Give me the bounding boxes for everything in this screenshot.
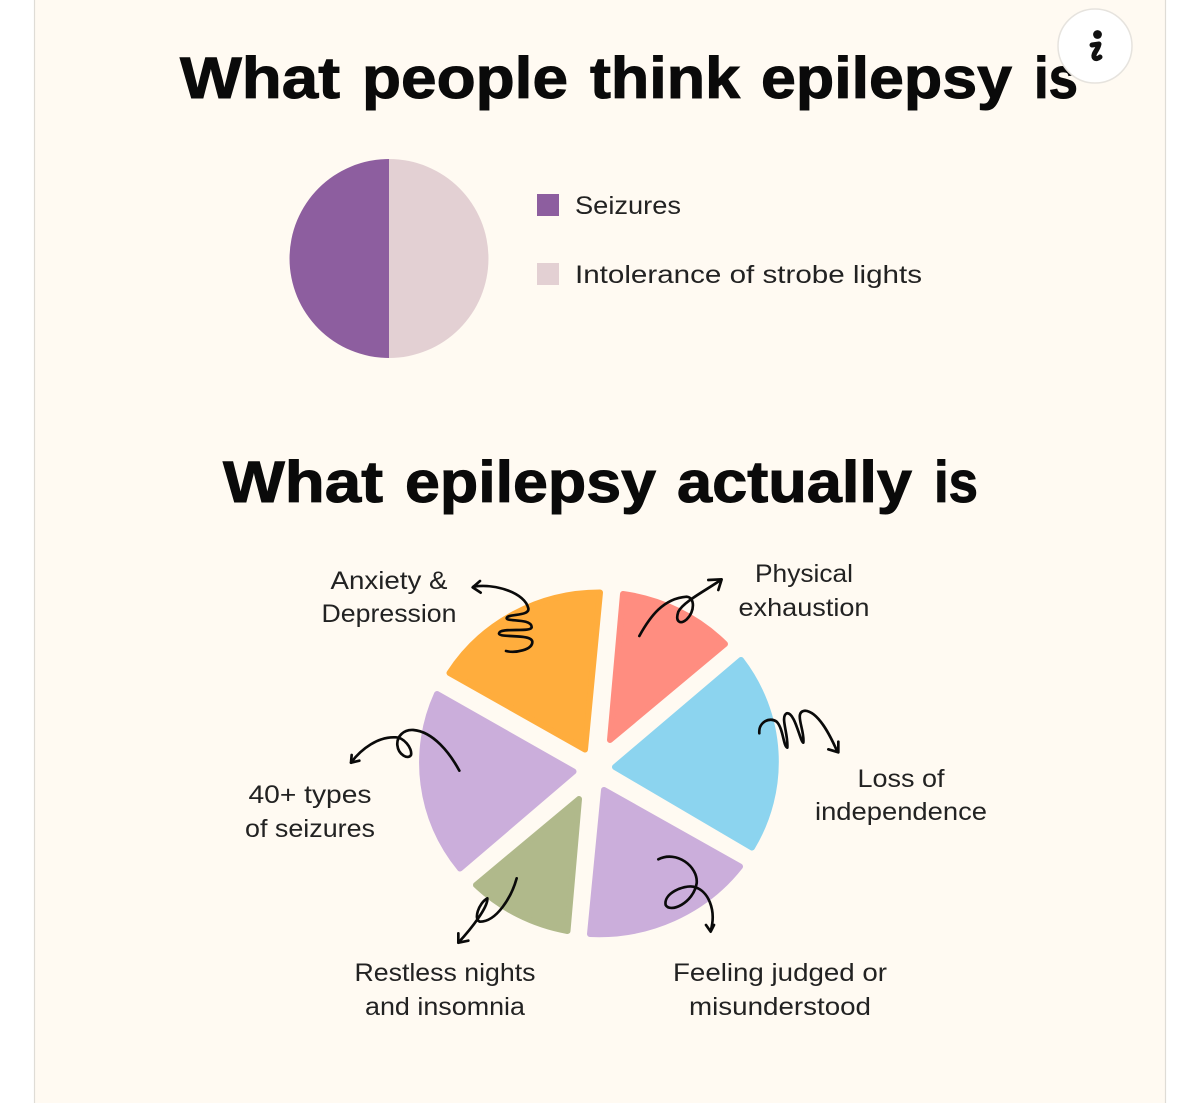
heading: what epilepsy actually is bbox=[223, 450, 978, 515]
legend: seizures bbox=[537, 192, 681, 220]
heading: what people think: epilepsy bbox=[761, 46, 1012, 111]
legend: seizures: Seizures bbox=[575, 192, 681, 220]
label: physical exhaustion: exhaustion bbox=[738, 594, 870, 622]
arrow: restless nights bbox=[458, 878, 517, 943]
label: 40+ types of seizures: of seizures bbox=[245, 815, 375, 843]
heading: what epilepsy actually is: epilepsy bbox=[405, 450, 656, 515]
label: restless nights and insomnia: Restless nights bbox=[354, 959, 536, 987]
legend: intolerance of strobe lights: Intolerance of strobe lights bbox=[575, 261, 922, 289]
label: feeling judged or misunderstood bbox=[673, 959, 887, 1021]
label: restless nights and insomnia bbox=[354, 959, 536, 1021]
arrow: loss of independence bbox=[759, 711, 838, 752]
label: feeling judged or misunderstood: misunderstood bbox=[689, 993, 871, 1021]
label: 40+ types of seizures bbox=[245, 781, 375, 843]
label: restless nights and insomnia: and insomnia bbox=[365, 993, 525, 1021]
arrow: physical bbox=[639, 579, 722, 636]
slice: physical exhaustion bbox=[610, 594, 725, 740]
arrow: anxiety bbox=[473, 581, 532, 652]
arrow: 40+ types bbox=[351, 730, 459, 771]
heading: what people think: What bbox=[180, 46, 340, 111]
heading: what people think: is bbox=[1034, 46, 1078, 111]
slice: anxiety and depression bbox=[450, 592, 600, 750]
label: loss of independence: Loss of bbox=[858, 765, 945, 793]
slice: feeling judged bbox=[590, 790, 740, 934]
slice: intolerance of strobe lights bbox=[389, 159, 488, 358]
label: anxiety and depression: Depression bbox=[322, 600, 456, 628]
label: loss of independence: independence bbox=[815, 798, 987, 826]
label: anxiety and depression bbox=[322, 567, 456, 628]
label: physical exhaustion: Physical bbox=[755, 560, 853, 588]
slice: seizures bbox=[290, 159, 389, 358]
slice: restless nights bbox=[476, 799, 579, 931]
label: anxiety and depression: Anxiety & bbox=[330, 567, 448, 595]
heading: what people think: people bbox=[362, 46, 568, 111]
icon: info button bbox=[1058, 9, 1132, 83]
heading: what people think: think bbox=[590, 46, 741, 111]
heading: what epilepsy actually is: actually bbox=[677, 450, 912, 515]
heading: what epilepsy actually is: is bbox=[934, 450, 978, 515]
label: feeling judged or misunderstood: Feeling judged or bbox=[673, 959, 887, 987]
heading: what people think bbox=[180, 46, 1078, 111]
label: 40+ types of seizures: 40+ types bbox=[248, 781, 372, 809]
slice: loss of independence bbox=[615, 660, 776, 848]
label: loss of independence bbox=[815, 765, 987, 826]
arrow: feeling judged bbox=[658, 857, 714, 932]
heading: what epilepsy actually is: What bbox=[223, 450, 383, 515]
label: physical exhaustion bbox=[738, 560, 870, 622]
chart: perception pie bbox=[290, 159, 488, 358]
chart: reality pie bbox=[422, 592, 776, 934]
slice: 40+ types of seizures bbox=[422, 694, 574, 868]
